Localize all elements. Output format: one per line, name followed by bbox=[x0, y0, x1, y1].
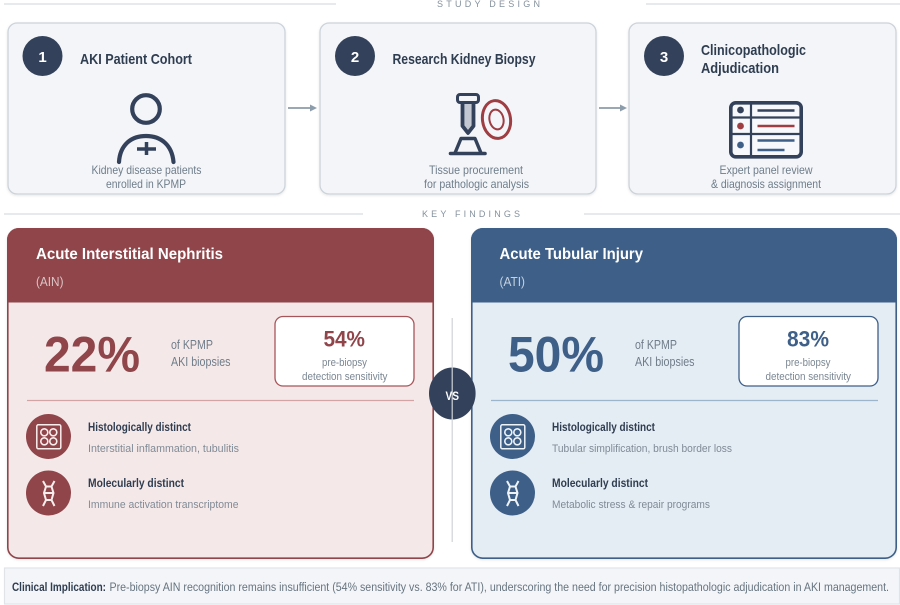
step description 1: enrolled in KPMP bbox=[106, 177, 186, 191]
statistic: 22 percent of biopsies bbox=[44, 326, 230, 382]
text: histologically distinct ATI: Histologically distinct bbox=[552, 420, 655, 434]
text: histologically distinct AIN bbox=[88, 420, 240, 455]
panel header: ATI: (ATI) bbox=[500, 274, 525, 289]
panel header: AIN bbox=[7, 228, 434, 302]
text: molecularly distinct AIN bbox=[88, 476, 238, 511]
badge: VS divider: VS bbox=[446, 389, 459, 403]
statistic: 22 percent of biopsies: of KPMP bbox=[171, 338, 213, 352]
step description 2: Tissue procurement bbox=[429, 163, 524, 177]
callout: 83 percent sensitivity: detection sensitivity bbox=[766, 371, 851, 383]
step title 2: Research Kidney Biopsy bbox=[392, 51, 536, 68]
callout: 54 percent sensitivity bbox=[275, 316, 414, 386]
step number 1 bbox=[22, 36, 62, 76]
panel: step 1 AKI patient cohort bbox=[8, 23, 285, 194]
icon: DNA ATI bbox=[490, 470, 535, 516]
icon: patient bbox=[119, 95, 174, 162]
step title 3 bbox=[701, 42, 806, 77]
step title 3: Clinicopathologic bbox=[701, 42, 806, 59]
panel header: ATI: Acute Tubular Injury bbox=[500, 246, 643, 263]
step title 1: AKI Patient Cohort bbox=[80, 51, 192, 68]
text: molecularly distinct ATI: Metabolic stress & repair programs bbox=[552, 499, 711, 511]
panel header: ATI bbox=[471, 228, 897, 302]
text: molecularly distinct ATI bbox=[552, 476, 711, 511]
callout: 54 percent sensitivity: 54% bbox=[324, 326, 365, 352]
icon: histology AIN bbox=[26, 414, 71, 459]
step number 1: 1 bbox=[38, 49, 47, 66]
panel: step 2 research kidney biopsy bbox=[320, 23, 596, 194]
step number 2: 2 bbox=[351, 49, 359, 66]
callout: 54 percent sensitivity: detection sensitivity bbox=[302, 371, 388, 383]
panel: acute tubular injury bbox=[471, 228, 897, 559]
text: histologically distinct ATI bbox=[552, 420, 733, 455]
badge: VS divider bbox=[429, 318, 476, 542]
step title 3: Adjudication bbox=[701, 60, 779, 77]
icon: review table bbox=[731, 103, 801, 157]
step description 3: Expert panel review bbox=[720, 163, 813, 177]
step description 3 bbox=[711, 163, 822, 191]
statistic: 50 percent of biopsies: AKI biopsies bbox=[635, 355, 694, 369]
icon: histology ATI bbox=[490, 414, 535, 459]
panel: acute interstitial nephritis bbox=[7, 228, 434, 559]
step description 2: for pathologic analysis bbox=[424, 177, 529, 191]
statistic: 22 percent of biopsies: 22% bbox=[44, 326, 140, 382]
text: histologically distinct ATI: Tubular simplification, brush border loss bbox=[552, 443, 733, 455]
step description 2 bbox=[424, 163, 529, 191]
panel header: AIN: Acute Interstitial Nephritis bbox=[36, 246, 223, 263]
callout: 54 percent sensitivity: pre-biopsy bbox=[322, 357, 367, 369]
panel header: AIN: (AIN) bbox=[36, 274, 64, 289]
statistic: 50 percent of biopsies: of KPMP bbox=[635, 338, 677, 352]
text: molecularly distinct AIN: Immune activation transcriptome bbox=[88, 499, 238, 511]
callout: 83 percent sensitivity: 83% bbox=[787, 326, 829, 352]
heading: key findings: KEY FINDINGS bbox=[422, 209, 520, 219]
step description 1: Kidney disease patients bbox=[92, 163, 202, 177]
statistic: 50 percent of biopsies bbox=[508, 326, 694, 382]
text: molecularly distinct AIN: Molecularly distinct bbox=[88, 476, 184, 490]
text: histologically distinct AIN: Histologically distinct bbox=[88, 420, 191, 434]
panel: step 3 clinicopathologic adjudication bbox=[629, 23, 896, 194]
text: histologically distinct AIN: Interstitial inflammation, tubulitis bbox=[88, 443, 240, 455]
callout: 83 percent sensitivity: pre-biopsy bbox=[786, 357, 831, 369]
step description 3: & diagnosis assignment bbox=[711, 177, 822, 191]
step description 1 bbox=[92, 163, 202, 191]
step number 2 bbox=[335, 36, 375, 76]
callout: clinical implication: Clinical Implication: bbox=[12, 580, 106, 594]
icon: DNA AIN bbox=[26, 470, 71, 516]
arrow: step 1 to step 2 bbox=[288, 104, 317, 112]
text: molecularly distinct ATI: Molecularly distinct bbox=[552, 476, 648, 490]
icon: biopsy device and tissue bbox=[450, 94, 513, 154]
callout: 83 percent sensitivity bbox=[739, 316, 878, 386]
statistic: 22 percent of biopsies: AKI biopsies bbox=[171, 355, 230, 369]
step number 3: 3 bbox=[660, 49, 668, 66]
step number 3 bbox=[644, 36, 684, 76]
arrow: step 2 to step 3 bbox=[599, 104, 627, 112]
statistic: 50 percent of biopsies: 50% bbox=[508, 326, 604, 382]
callout: clinical implication bbox=[4, 568, 900, 604]
